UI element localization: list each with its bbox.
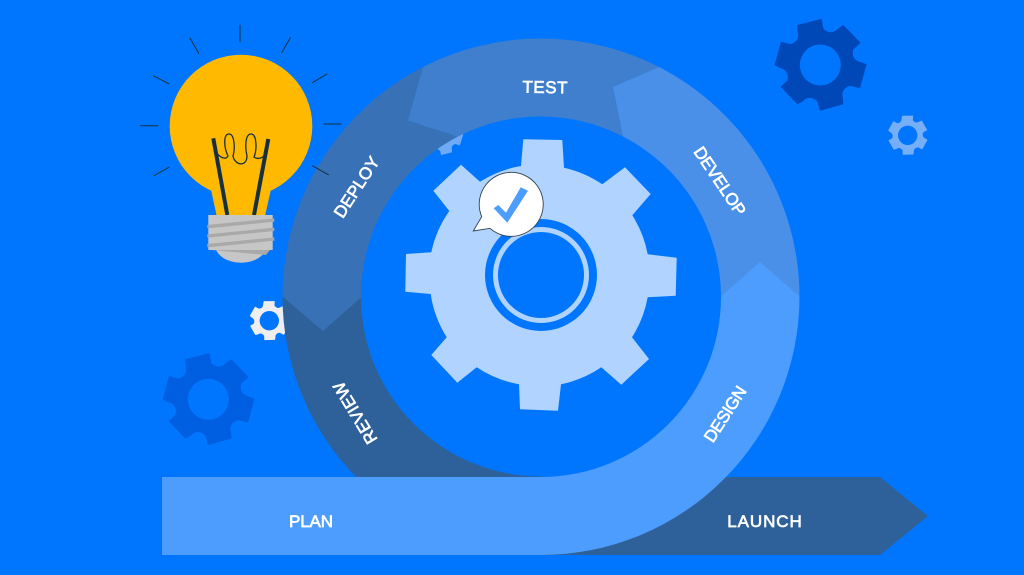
label: develop: DEVELOP: [690, 143, 750, 219]
bulb rays: [141, 25, 341, 176]
icon: light bulb: [141, 25, 341, 263]
label: review: REVIEW: [330, 378, 381, 447]
ring segment: review: [282, 296, 541, 555]
icon: white gear behind ring: [245, 296, 294, 345]
bulb filament: [213, 134, 268, 215]
ring segment: develop: [613, 67, 800, 296]
bulb base: [208, 215, 273, 263]
gear hub ring: [496, 230, 586, 320]
label: deploy: DEPLOY: [330, 153, 384, 221]
bulb base shadow: [212, 250, 270, 255]
ring segment: deploy: [282, 67, 458, 331]
label: launch: LAUNCH: [727, 512, 802, 531]
label: plan: PLAN: [289, 512, 333, 531]
icon: dark gear top right: [775, 19, 867, 111]
icon: medium blue gear lower left: [163, 353, 255, 445]
label: test: TEST: [522, 78, 568, 97]
check mark: [494, 187, 528, 223]
label: design: DESIGN: [700, 383, 751, 446]
arrow: launch: [541, 477, 928, 555]
icon: central gear: [405, 139, 677, 411]
icon: speech bubble with check: [473, 172, 543, 236]
ring segment: test: [408, 38, 659, 137]
ring segment and plan arrow: design: [162, 262, 800, 555]
icon: small gear behind ring: [420, 112, 464, 156]
icon: light gear top right: [883, 111, 932, 160]
bulb glass: [170, 55, 312, 216]
bulb base threads: [207, 220, 274, 246]
